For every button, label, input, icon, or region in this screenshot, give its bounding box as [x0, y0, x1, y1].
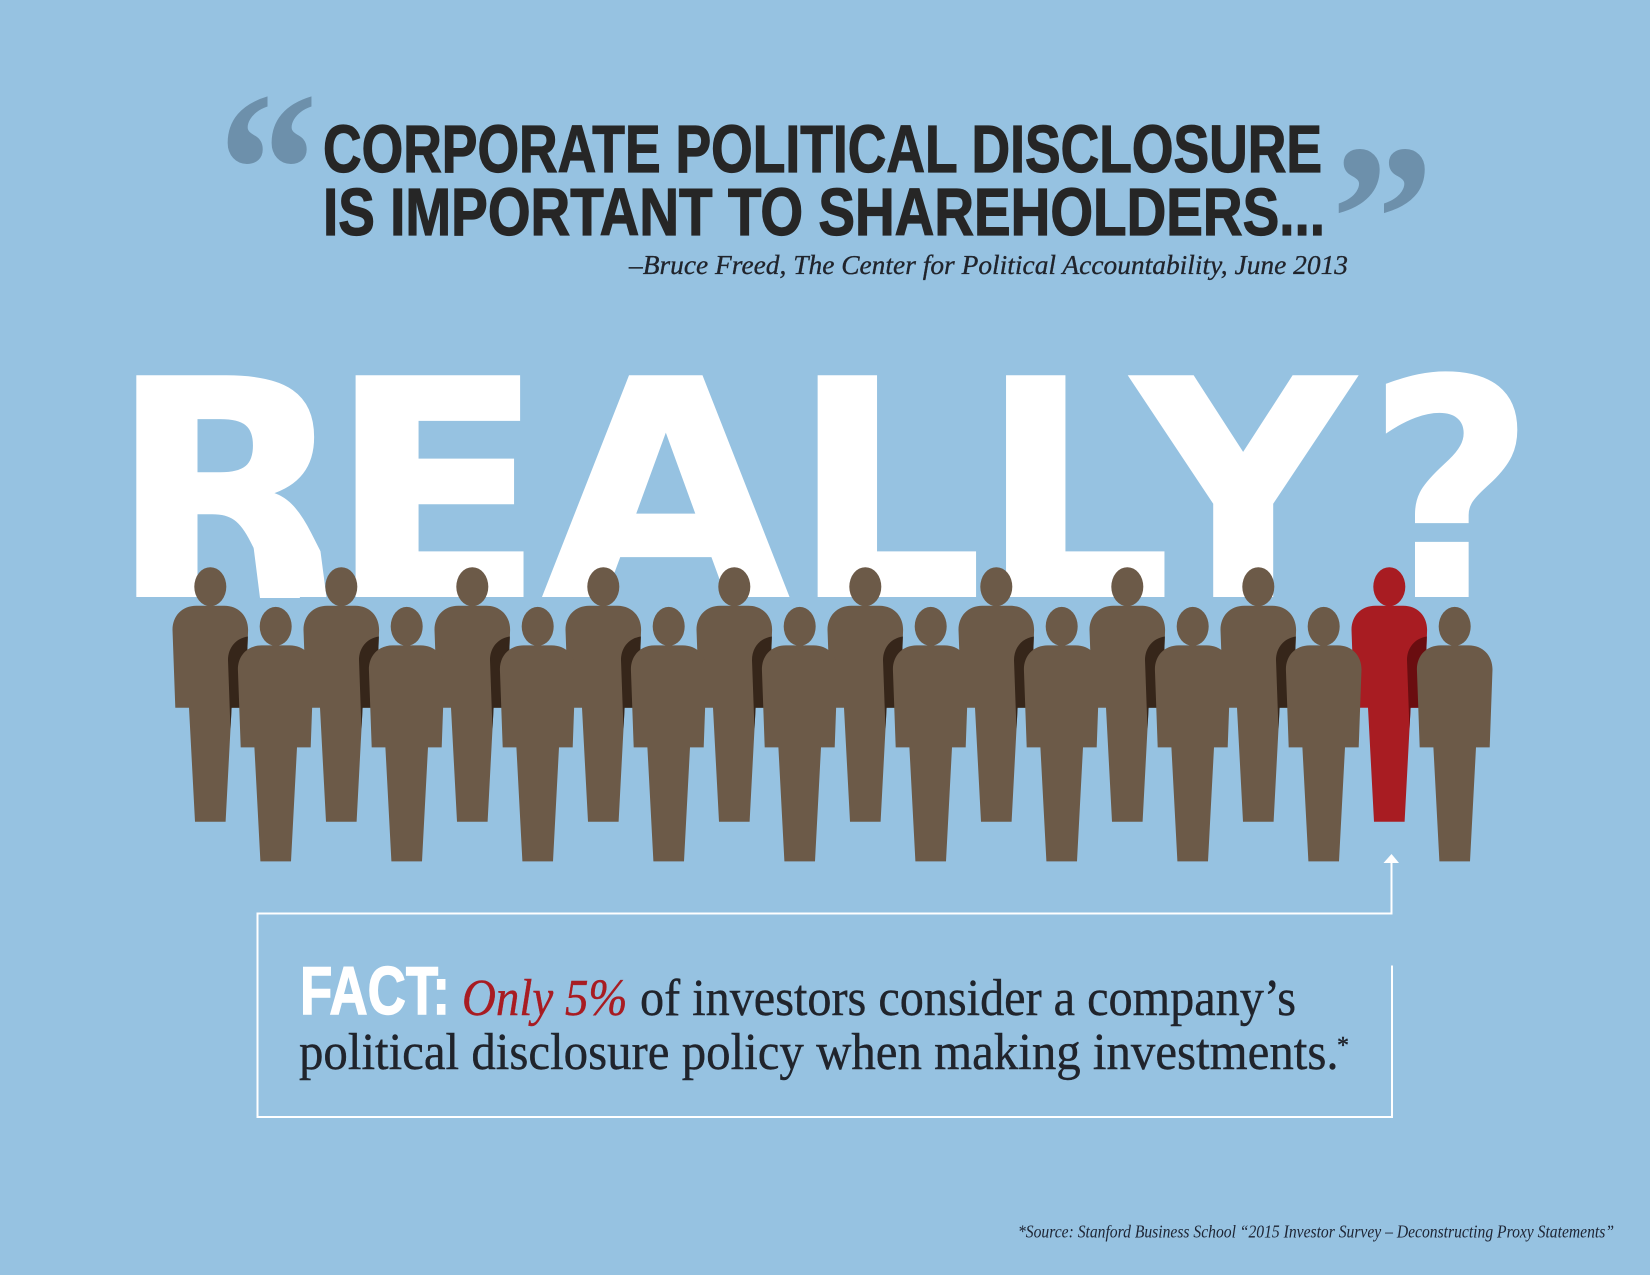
row of people: back row	[172, 567, 1428, 822]
person 18	[1286, 607, 1362, 861]
person 20	[1417, 607, 1492, 861]
person 4	[369, 607, 444, 861]
person 7	[566, 567, 642, 822]
person 14	[1024, 607, 1100, 861]
giant word REALLY?	[110, 317, 1535, 667]
attribution: –Bruce Freed, The Center for Political Accountability, June 2013	[628, 250, 1348, 280]
person 1	[172, 567, 248, 822]
giant word REALLY?: ?	[1368, 318, 1535, 667]
giant word REALLY?: A	[543, 317, 791, 666]
opening quote mark: “	[218, 46, 318, 293]
giant word REALLY?: L	[792, 318, 983, 666]
footnote asterisk: *	[1337, 1033, 1349, 1059]
row of people: front row	[238, 607, 1492, 861]
headline	[323, 112, 1325, 250]
headline: CORPORATE POLITICAL DISCLOSURE	[323, 112, 1322, 187]
person 10	[762, 607, 838, 861]
fact text: line two: political disclosure policy when making investments.	[299, 1024, 1339, 1081]
headline: IS IMPORTANT TO SHAREHOLDERS...	[323, 175, 1325, 250]
person 16	[1155, 607, 1230, 861]
person 13	[958, 567, 1034, 822]
person 15	[1090, 567, 1166, 822]
person 5	[434, 567, 510, 822]
fact text: line one: of investors consider a company’s	[640, 970, 1296, 1027]
red highlighted person	[1352, 567, 1428, 822]
person 2	[238, 607, 314, 861]
giant word REALLY?: Y	[1129, 318, 1356, 667]
person 12	[893, 607, 968, 861]
person 3	[304, 567, 380, 822]
fact label: FACT:	[300, 953, 450, 1029]
giant word REALLY?: L	[980, 318, 1171, 666]
person 8	[631, 607, 706, 861]
closing quote mark: ”	[1331, 102, 1434, 337]
fact text: highlighted share: Only 5%	[462, 970, 628, 1027]
giant word REALLY?: E	[328, 317, 545, 666]
callout frame with arrow to red person	[258, 854, 1399, 1117]
giant word REALLY?: R	[110, 317, 347, 666]
person 11	[828, 567, 904, 822]
person 9	[696, 567, 772, 822]
person 17	[1220, 567, 1296, 822]
person 6	[500, 607, 576, 861]
